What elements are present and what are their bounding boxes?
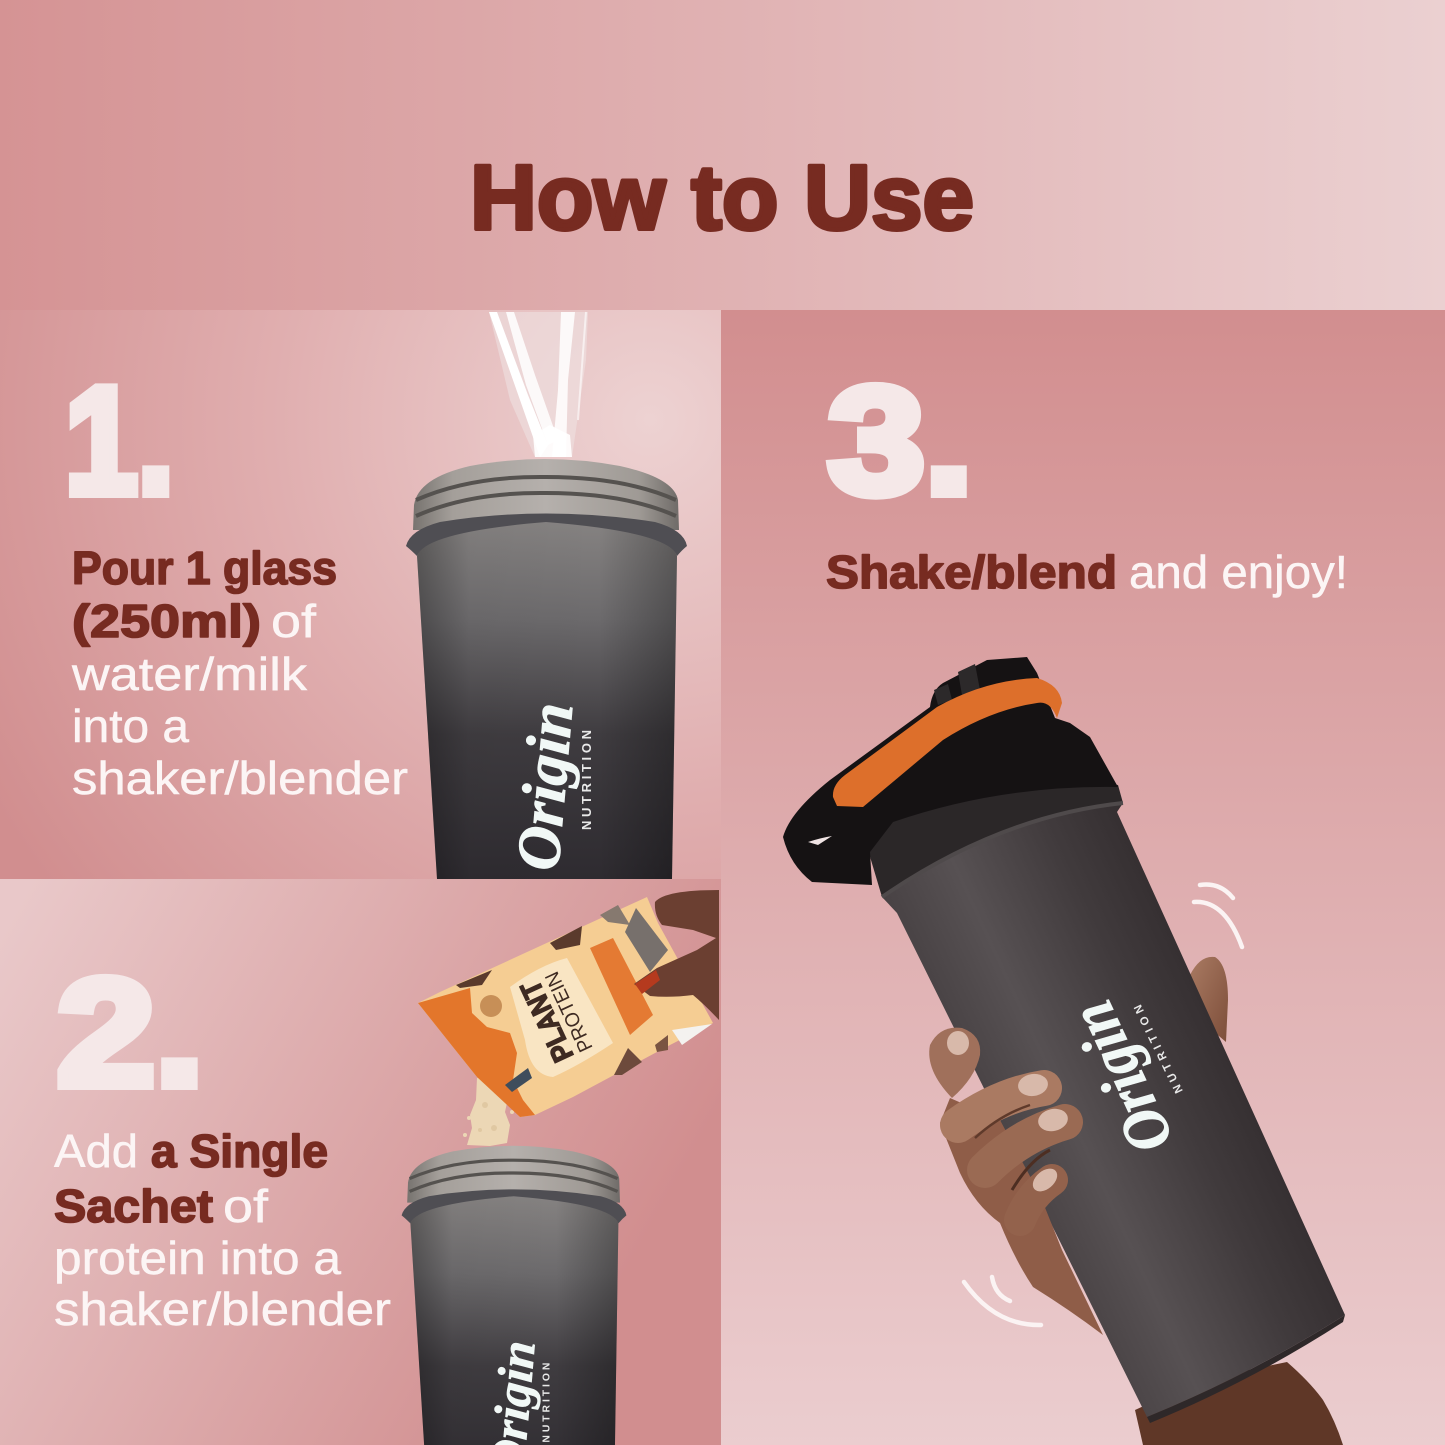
water stream (489, 312, 588, 457)
step 1 instruction text: Pour 1 glass (72, 542, 337, 594)
step 2 instruction text: a Single (151, 1125, 328, 1177)
step 2 instruction text: Add (54, 1125, 138, 1177)
fingernails (947, 1031, 1070, 1196)
orange strap (833, 678, 1062, 807)
hand holding sachet (634, 890, 719, 1020)
wrist and thumb behind bottle (1135, 957, 1343, 1445)
finger 2 (958, 1088, 1044, 1125)
logo: Origin Nutrition: Origin (504, 700, 587, 873)
step 2 instruction text: of (223, 1180, 268, 1232)
shaker bottle: step 3 (783, 657, 1345, 1423)
powder falling (463, 1078, 514, 1146)
finger 3 (985, 1122, 1065, 1170)
step 3 instruction text: Shake/blend (826, 546, 1117, 598)
step 3 number: 3. (828, 356, 973, 526)
finger 4 (1020, 1180, 1052, 1220)
motion marks (964, 885, 1242, 1325)
header band background (0, 0, 1445, 310)
sachet label: Plant Protein: PLANT (515, 975, 580, 1067)
step 2 instruction text: protein into a (54, 1232, 341, 1284)
panel 2 background (0, 879, 721, 1445)
step 1 instruction text (71, 542, 408, 804)
title: How to Use (470, 147, 974, 249)
finger 1 (929, 1028, 980, 1098)
step 3 instruction text: and enjoy! (1129, 546, 1348, 598)
hand gripping bottle (929, 1028, 1103, 1335)
step 1 instruction text: shaker/blender (72, 752, 408, 804)
step 2 instruction text: Sachet (54, 1180, 213, 1232)
logo: Origin Nutrition: Origin (1056, 991, 1187, 1164)
step 1 instruction text: (250ml) (72, 595, 261, 647)
step 1 number: 1. (65, 356, 174, 526)
logo: Origin Nutrition: NUTRITION (542, 1363, 553, 1443)
sachet label: Plant Protein: PROTEIN (541, 968, 598, 1055)
step 1 instruction text: of (271, 595, 316, 647)
step 2 number: 2. (57, 948, 204, 1118)
shaker bottle: step 2 (402, 1146, 626, 1445)
step 1 instruction text: water/milk (71, 648, 308, 700)
protein sachet (418, 897, 713, 1117)
logo: Origin Nutrition: NUTRITION (579, 730, 594, 830)
panel 3 background (721, 310, 1445, 1445)
logo: Origin Nutrition: NUTRITION (1132, 1003, 1186, 1095)
shaker bottle: step 1 (406, 459, 687, 879)
step 1 instruction text: into a (72, 700, 189, 752)
panel 1 background (0, 310, 721, 879)
step 2 instruction text (54, 1125, 391, 1335)
bottle collar (868, 781, 1123, 897)
step 3 instruction text (826, 546, 1348, 598)
step 2 instruction text: shaker/blender (54, 1283, 391, 1335)
bottle lid with handle (783, 657, 1118, 885)
